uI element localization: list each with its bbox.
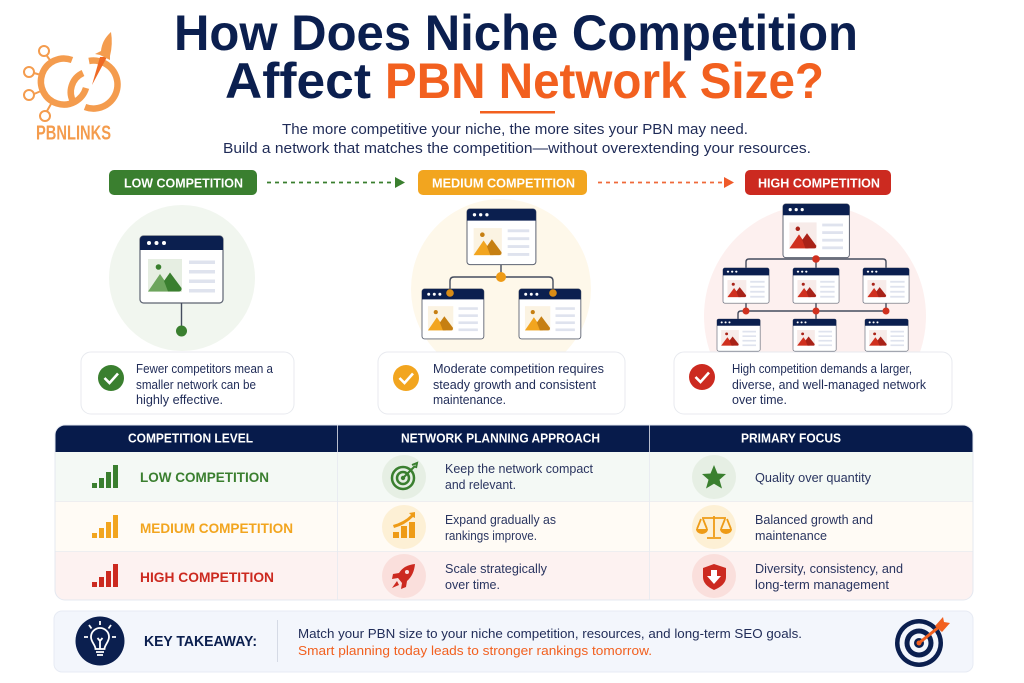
title <box>174 5 858 109</box>
pill: low competition <box>109 170 257 195</box>
row: medium competition <box>92 505 873 549</box>
row: medium competition: MEDIUM COMPETITION <box>140 520 293 536</box>
row: low competition: and relevant. <box>445 478 516 492</box>
pill: medium competition: MEDIUM COMPETITION <box>432 176 575 190</box>
subtitle: The more competitive your niche, the more sites your PBN may need. <box>282 121 748 138</box>
row: low competition <box>92 455 872 499</box>
callout: medium competition: steady growth and consistent <box>433 378 597 392</box>
callout: low competition: highly effective. <box>136 393 223 407</box>
row: high competition: over time. <box>445 578 500 592</box>
callout: high competition: diverse, and well-managed network <box>732 378 927 392</box>
row: high competition: Diversity, consistency, and <box>755 562 903 576</box>
callout: high competition <box>674 352 952 414</box>
icon: light bulb <box>76 616 124 666</box>
callout: medium competition: maintenance. <box>433 393 506 407</box>
pill: low competition: LOW COMPETITION <box>124 176 243 190</box>
callout: low competition: smaller network can be <box>136 378 256 392</box>
row: medium competition: Expand gradually as <box>445 513 556 527</box>
callout: medium competition <box>378 352 625 414</box>
diagram: medium competition network <box>411 199 591 379</box>
table header: COMPETITION LEVEL <box>128 432 253 446</box>
table header: PRIMARY FOCUS <box>741 432 841 446</box>
diagram: low competition network <box>109 205 255 351</box>
row: medium competition: rankings improve. <box>445 529 537 543</box>
icon: target with arrow <box>895 617 950 667</box>
takeaway label: KEY TAKEAWAY: <box>144 634 257 650</box>
takeaway text: Smart planning today leads to stronger rankings tomorrow. <box>298 643 652 658</box>
row: high competition: HIGH COMPETITION <box>140 569 274 585</box>
row: medium competition: Balanced growth and <box>755 513 873 527</box>
row: high competition: long-term management <box>755 578 890 592</box>
takeaway text: Match your PBN size to your niche competition, resources, and long-term SEO goals. <box>298 626 802 641</box>
title: How Does Niche Competition <box>174 5 858 61</box>
logo: PBNLINKS <box>24 32 118 144</box>
table header: NETWORK PLANNING APPROACH <box>401 432 600 446</box>
title: PBN Network Size? <box>385 53 824 109</box>
callout: high competition: High competition demands a larger, <box>732 362 912 376</box>
row: low competition: Keep the network compact <box>445 462 594 476</box>
takeaway text <box>298 626 802 658</box>
pill: high competition: HIGH COMPETITION <box>758 176 880 190</box>
title underline accent <box>480 111 555 114</box>
arrow: medium to high <box>598 177 734 188</box>
row: low competition: LOW COMPETITION <box>140 469 269 485</box>
key takeaway panel <box>54 611 973 672</box>
pill: high competition <box>745 170 891 195</box>
arrow: low to medium <box>267 177 405 188</box>
row: medium competition: maintenance <box>755 529 827 543</box>
comparison table <box>55 425 973 600</box>
logo: PBNLINKS: PBNLINKS <box>36 122 111 144</box>
diagram: high competition network <box>704 204 926 352</box>
table header <box>128 432 841 446</box>
callout: low competition: Fewer competitors mean a <box>136 362 273 376</box>
pill: medium competition <box>418 170 587 195</box>
callout: medium competition: Moderate competition requires <box>433 362 604 376</box>
title: Affect <box>225 53 371 109</box>
row: high competition <box>92 554 903 598</box>
callout: low competition <box>81 352 294 414</box>
row: high competition: Scale strategically <box>445 562 548 576</box>
subtitle: Build a network that matches the competition—without overextending your resources. <box>223 140 811 157</box>
row: low competition: Quality over quantity <box>755 471 872 485</box>
subtitle <box>223 121 811 157</box>
callout: high competition: over time. <box>732 393 787 407</box>
